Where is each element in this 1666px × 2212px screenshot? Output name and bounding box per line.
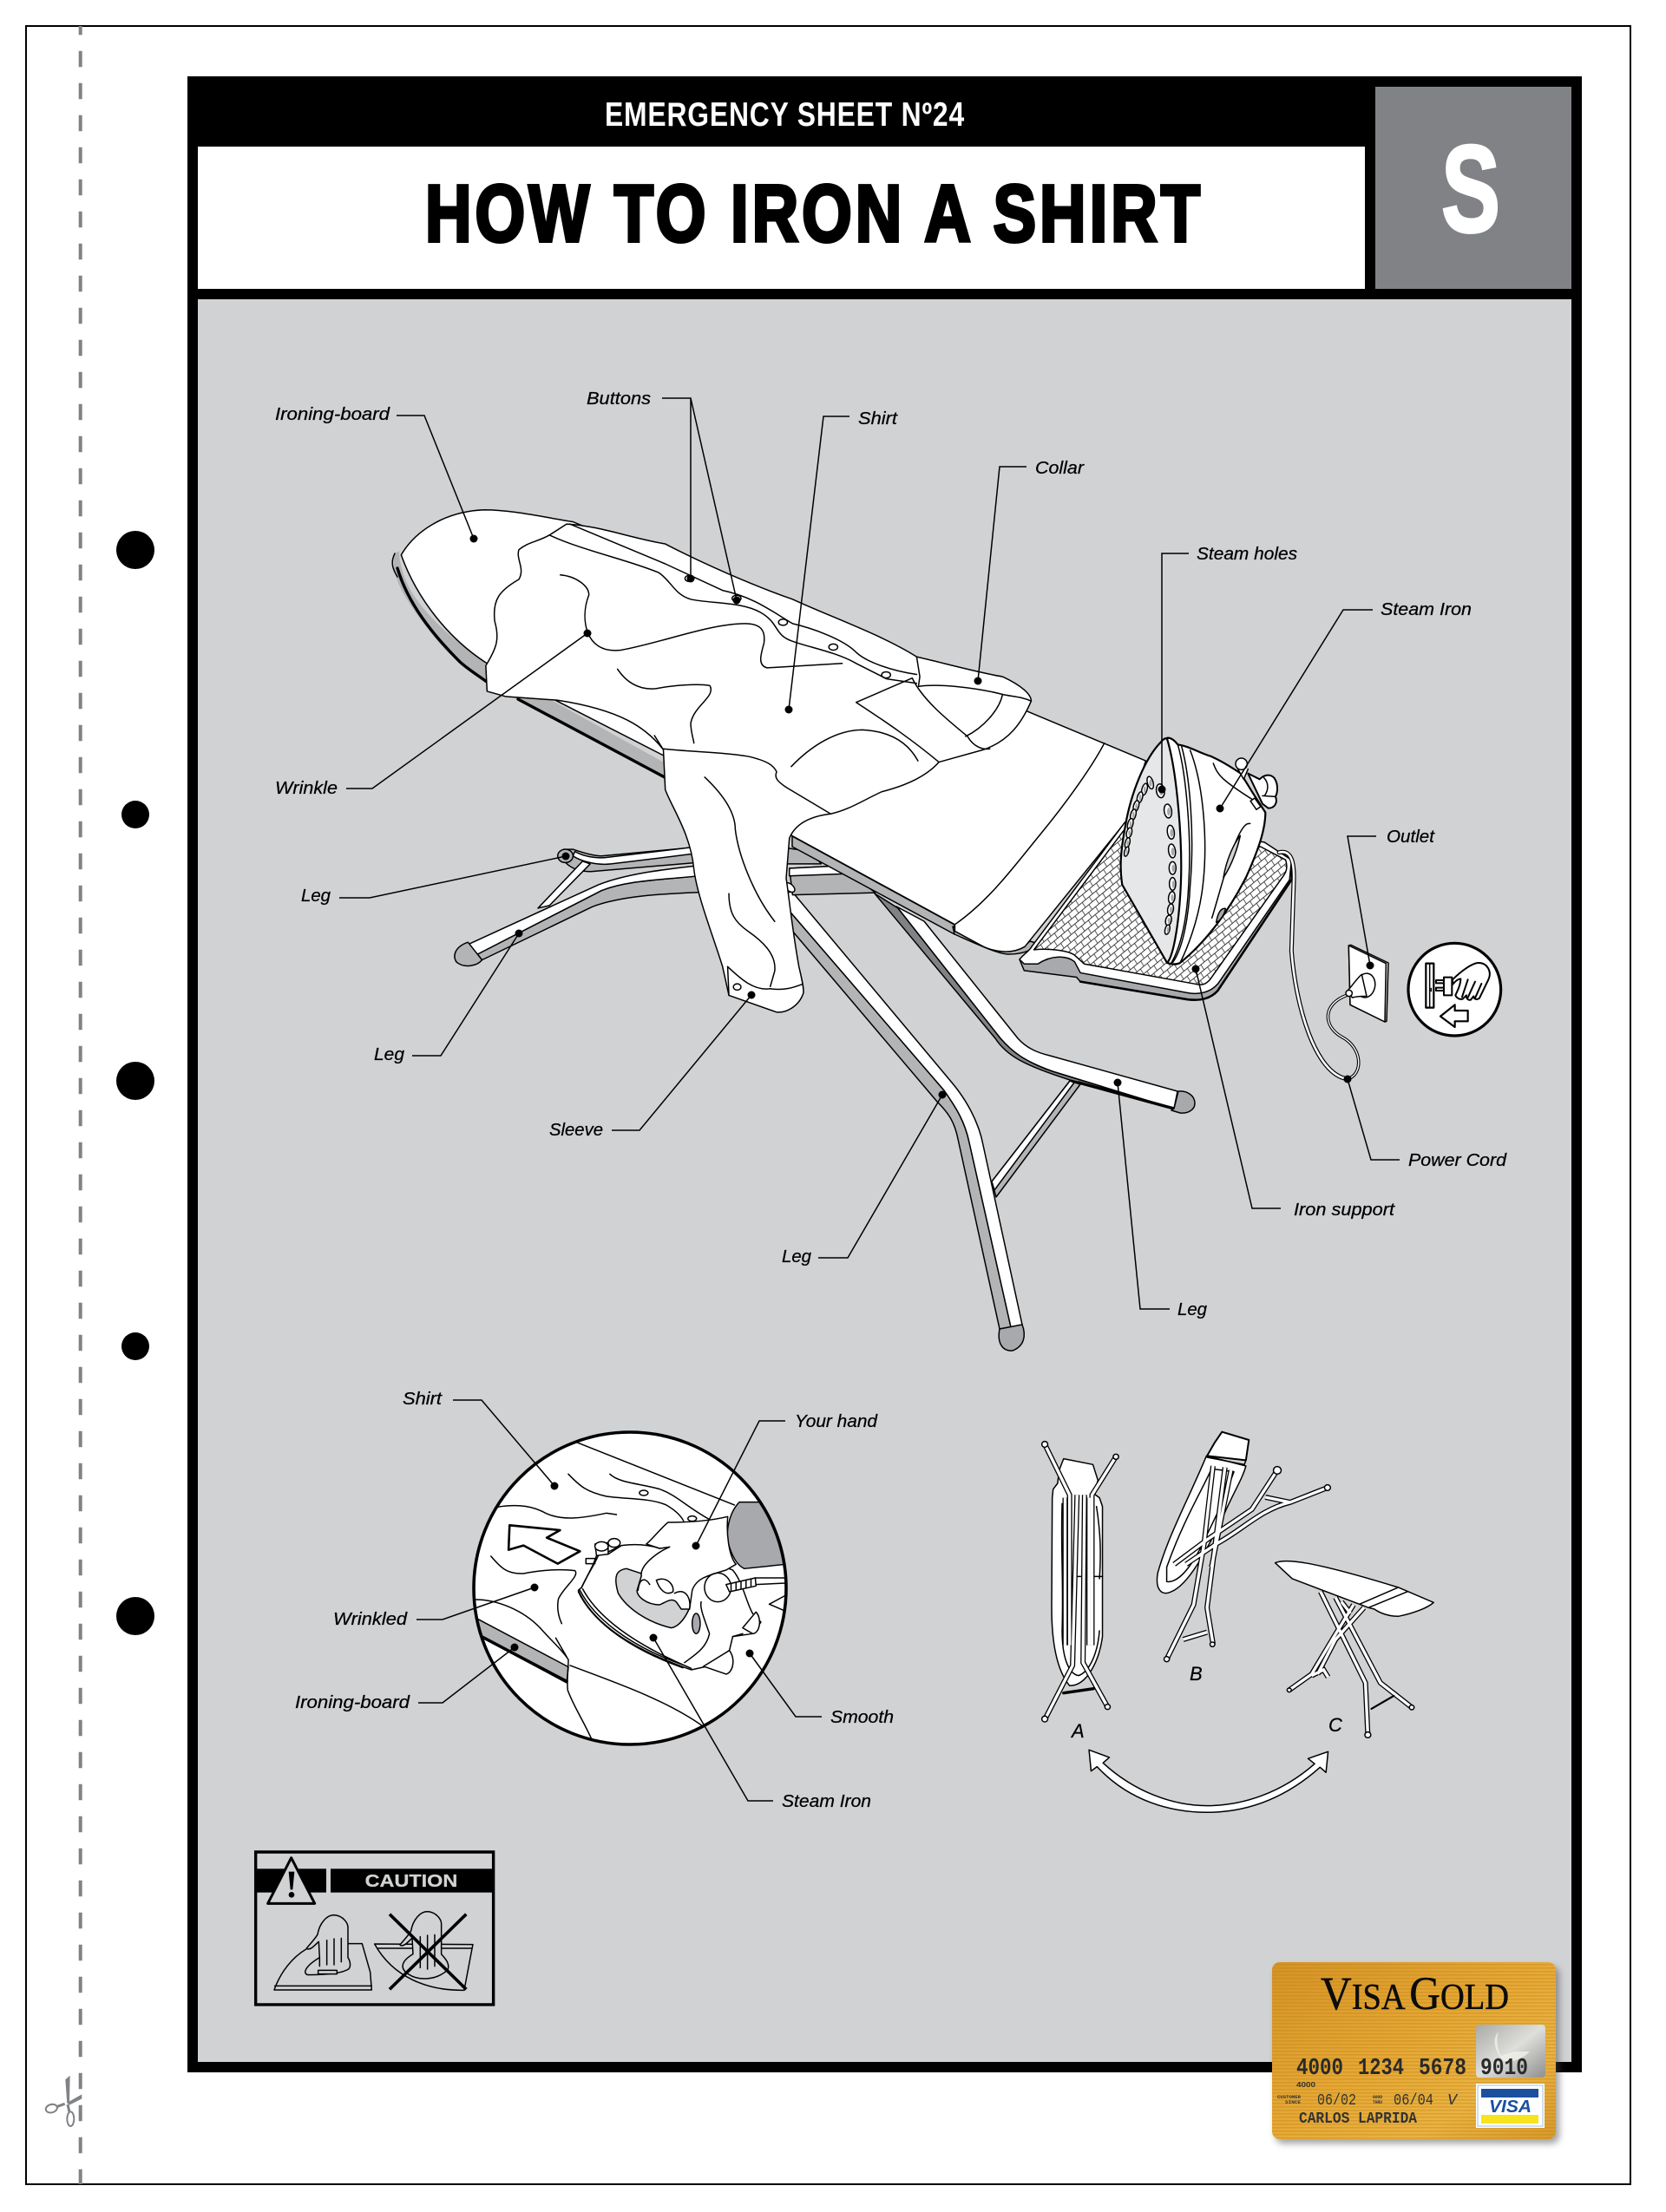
- label: Power Cord: [1343, 1076, 1507, 1170]
- caution text: CAUTION: [365, 1871, 457, 1891]
- icon: correct iron grip: [274, 1915, 371, 1990]
- label: Outlet: [1348, 828, 1435, 970]
- cut line: [79, 26, 82, 2184]
- detail inset: ironing close-up: [474, 1432, 786, 1744]
- icon: unplug instruction: [1408, 943, 1501, 1036]
- card details: 4000: [1296, 2081, 1316, 2089]
- title: HOW TO IRON A SHIRT: [425, 168, 1204, 259]
- card details: V: [1447, 2092, 1459, 2110]
- outlet and plug: [1346, 945, 1388, 1022]
- binder holes: [116, 531, 154, 1635]
- card details: [1277, 2081, 1459, 2128]
- board position C: [1276, 1561, 1433, 1738]
- label: Leg centre: [782, 1091, 946, 1266]
- card number: 4000: [1296, 2056, 1343, 2082]
- panel: size tab: [1375, 87, 1571, 289]
- main illustration: ironing board with shirt and iron: [392, 510, 1501, 1351]
- card details: CARLOS LAPRIDA: [1299, 2111, 1417, 2128]
- label: inset Ironing-board: Ironing-board: [295, 1693, 410, 1712]
- label: Steam Iron: Steam Iron: [1381, 600, 1472, 619]
- label: Buttons: Buttons: [587, 389, 651, 409]
- label: Power Cord: Power Cord: [1408, 1151, 1507, 1170]
- card number: 5678: [1419, 2056, 1466, 2082]
- label: Sleeve: [549, 991, 755, 1140]
- label: Shirt: [784, 409, 899, 713]
- iron support: [1020, 822, 1291, 1000]
- caution box: [256, 1852, 494, 2005]
- visa logo: VISA: [1489, 2097, 1532, 2117]
- card number: 9010: [1480, 2056, 1528, 2082]
- board position B: [1157, 1432, 1330, 1662]
- arrow: ironing direction: [508, 1525, 580, 1564]
- label: inset Shirt: Shirt: [403, 1390, 443, 1409]
- icon: warning triangle: [268, 1858, 315, 1903]
- card details: 06/04: [1394, 2092, 1433, 2110]
- icon: scissors: [45, 2076, 82, 2126]
- heading: emergency sheet: EMERGENCY SHEET Nº24: [605, 96, 965, 134]
- label: Buttons: [587, 389, 741, 604]
- label: A: A: [1070, 1720, 1085, 1742]
- panel: title box: [198, 147, 1365, 289]
- label: inset Wrinkled: [333, 1584, 538, 1629]
- hologram: [1476, 2025, 1545, 2078]
- label: Iron support: Iron support: [1294, 1201, 1396, 1220]
- card details: CUSTOMER: [1277, 2095, 1301, 2100]
- label: C: C: [1328, 1714, 1342, 1736]
- label: Collar: [974, 459, 1085, 685]
- ironing board: [392, 551, 1039, 954]
- label: inset Ironing-board: [295, 1643, 519, 1712]
- label: Collar: Collar: [1035, 459, 1085, 478]
- legs of board: [781, 892, 1195, 1351]
- label: Leg upper left: [301, 852, 569, 906]
- label: inset Steam Iron: [649, 1634, 871, 1811]
- label: Outlet: Outlet: [1387, 828, 1435, 847]
- card number: [1296, 2056, 1528, 2082]
- shirt: [486, 524, 1031, 1012]
- label: Shirt: Shirt: [858, 409, 899, 429]
- panel: illustration background: [198, 299, 1571, 2062]
- arrow: folding direction: [1089, 1750, 1328, 1812]
- label: Steam holes: Steam holes: [1197, 545, 1297, 564]
- label: Leg lower left: Leg: [374, 1045, 404, 1064]
- label: Iron support: [1192, 965, 1396, 1220]
- power cord: [1279, 852, 1359, 1079]
- card brand name: VISA GOLD: [1321, 1967, 1509, 2019]
- black frame: [187, 76, 1582, 2072]
- steam iron: [1121, 738, 1277, 965]
- label: inset Smooth: [746, 1650, 894, 1727]
- card details: THRU: [1373, 2100, 1382, 2105]
- label: inset Shirt: [403, 1390, 559, 1490]
- card details: SINCE: [1285, 2100, 1301, 2105]
- card details: GOOD: [1373, 2095, 1382, 2100]
- label: Steam Iron: [1217, 600, 1472, 812]
- label: Ironing-board: [275, 405, 477, 543]
- size letter: S: [1441, 121, 1500, 259]
- label: inset Your hand: [692, 1412, 878, 1549]
- label: inset Wrinkled: Wrinkled: [333, 1610, 408, 1629]
- label: Ironing-board: Ironing-board: [275, 405, 390, 424]
- label: Leg centre: Leg: [782, 1247, 811, 1266]
- label: inset Steam Iron: Steam Iron: [782, 1792, 871, 1811]
- visa logo: [1476, 2084, 1545, 2128]
- label: Leg upper left: Leg: [301, 887, 331, 906]
- board position A: [1042, 1442, 1118, 1722]
- label: Wrinkle: Wrinkle: [275, 779, 338, 798]
- credit card: [1272, 1962, 1559, 2143]
- label: inset Your hand: Your hand: [795, 1412, 878, 1431]
- label: Leg lower left: [374, 930, 522, 1064]
- label: Leg right: [1114, 1079, 1207, 1319]
- icon: incorrect iron grip: [375, 1912, 473, 1990]
- label: B: B: [1190, 1663, 1203, 1685]
- label: Steam holes: [1158, 545, 1297, 793]
- folding sequence diagrams: [1042, 1432, 1433, 1812]
- card details: 06/02: [1317, 2092, 1356, 2110]
- label: Leg right: Leg: [1177, 1300, 1207, 1319]
- card number: 1234: [1358, 2056, 1404, 2082]
- label: Wrinkle: [275, 630, 592, 798]
- label: Sleeve: Sleeve: [549, 1121, 603, 1140]
- label: inset Smooth: Smooth: [830, 1708, 894, 1727]
